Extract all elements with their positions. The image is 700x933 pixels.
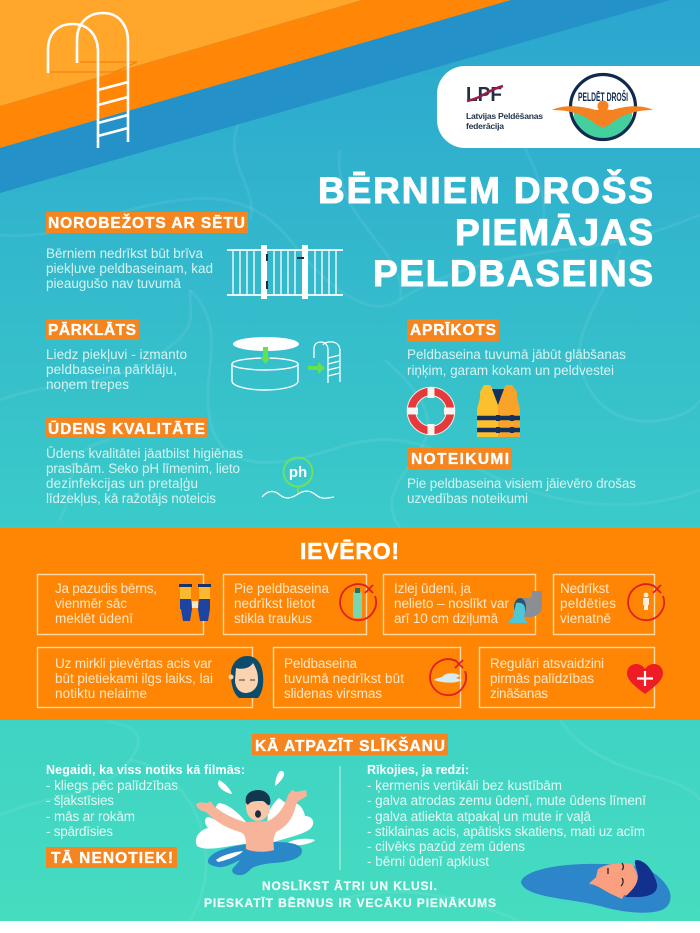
text block: Liedz piekļuvi - izmanto: [46, 347, 187, 362]
text block: [407, 476, 636, 506]
text block: [46, 446, 243, 506]
title: BĒRNIEM DROŠS: [318, 169, 653, 211]
card: glass: Pie peldbaseina: [234, 581, 329, 596]
text block: Bērniem nedrīkst būt brīva: [46, 246, 203, 261]
card: first aid: [480, 648, 663, 708]
panel: water quality section: [46, 418, 334, 506]
text block: act if you see: - stiklainas acis, apātisks skatiens, mati uz acīm: [367, 824, 645, 839]
icon: pool ladder: [48, 13, 137, 148]
icon: splashing child: [196, 771, 315, 875]
heading: ŪDENS KVALITĀTE: [48, 421, 205, 438]
text block: do not expect: - kliegs pēc palīdzības: [46, 778, 178, 793]
icon: heart with plus: [627, 664, 663, 694]
panel: light orange deck: [0, 0, 362, 106]
text block: prasībām. Seko pH līmenim, lieto: [46, 461, 240, 476]
logo caption: [466, 111, 543, 131]
title: [318, 169, 653, 294]
card: eyes closed: [38, 648, 263, 708]
text block: pieaugušo nav tuvumā: [46, 276, 181, 291]
text block: act if you see: - cilvēks pazūd zem ūdens: [367, 839, 525, 854]
card: glass: [224, 574, 376, 634]
card: pour water: nelieto – noslīkt var: [394, 596, 510, 611]
text block: uzvedības noteikumi: [407, 491, 528, 506]
panel: covered section: [46, 319, 340, 392]
heading: PĀRKLĀTS: [48, 322, 136, 339]
icon: pH meter: ph: [289, 464, 307, 481]
heading: IEVĒRO!: [300, 538, 399, 564]
text block: act if you see: - galva atrodas zemu ūdenī, mute ūdens līmenī: [367, 793, 646, 808]
text block: riņķim, garam kokam un peldvestei: [407, 363, 614, 378]
title: PIEMĀJAS: [455, 212, 653, 253]
logo: Peldēt droši: [552, 74, 653, 140]
panel: rules section: [407, 448, 636, 506]
text block: do not expect: Negaidi, ka viss notiks kā filmās:: [46, 763, 245, 777]
panel: equipped section: [407, 319, 626, 437]
text block: act if you see: - bērni ūdenī apklust: [367, 854, 489, 869]
card: glass: stikla traukus: [234, 611, 312, 626]
text block: act if you see: Rīkojies, ja redzi:: [367, 763, 469, 777]
card: slippery: slidenas virsmas: [284, 686, 382, 701]
text block: peldbaseina pārklāju,: [46, 362, 177, 377]
title: PELDBASEINS: [373, 253, 653, 294]
panel: pool water background: [0, 0, 700, 530]
card: not alone: vienatnē: [560, 611, 611, 626]
icon: fence: [227, 245, 343, 299]
text block: [46, 246, 213, 291]
text block: do not expect: - mās ar rokām: [46, 809, 135, 824]
text block: Peldbaseina tuvumā jābūt glābšanas: [407, 347, 626, 362]
icon: drowning person: [521, 860, 671, 913]
card: slippery: Peldbaseina: [284, 656, 357, 671]
icon: woman face: [228, 656, 263, 698]
card: first aid: Regulāri atsvaidzini: [490, 656, 604, 671]
card: lost child: Ja pazudis bērns,: [55, 581, 157, 596]
text block: do not expect: [46, 763, 245, 839]
panel: IEVĒRO section: [0, 528, 700, 720]
callout: TĀ NENOTIEK!: [51, 850, 173, 867]
closing message: NOSLĪKST ĀTRI UN KLUSI.: [262, 879, 437, 893]
logo caption: federācija: [466, 121, 504, 131]
text block: noņem trepes: [46, 377, 129, 392]
card: pour water: arī 10 cm dziļumā: [394, 611, 498, 626]
icon: covered pool: [232, 337, 299, 390]
card: first aid: pirmās palīdzības: [490, 671, 594, 686]
icon: lifebuoy: [407, 387, 455, 435]
card: slippery: tuvumā nedrīkst būt: [284, 671, 404, 686]
logo: LPF: LPF: [466, 84, 502, 106]
card: lost child: meklēt ūdenī: [55, 611, 133, 626]
logo caption: Latvijas Peldēšanas: [466, 111, 543, 121]
text block: Pie peldbaseina visiem jāievēro drošas: [407, 476, 636, 491]
icon: no glass bottle: [340, 584, 376, 620]
card: slippery: [274, 648, 466, 708]
panel: orange band: [0, 0, 511, 148]
text block: [46, 347, 187, 392]
heading: APRĪKOTS: [410, 322, 496, 339]
text block: act if you see: - ķermenis vertikāli bez kustībām: [367, 778, 562, 793]
icon: no wet floor: [430, 659, 466, 695]
icon: binoculars: [179, 584, 211, 621]
icon: removed ladder: [308, 342, 340, 383]
text block: act if you see: [367, 763, 646, 869]
logo: Peldēt droši: PELDĒT DROŠI: [578, 91, 628, 104]
card: eyes closed: notiktu nelaime: [55, 686, 147, 701]
card: pour water: Izlej ūdeni, ja: [394, 581, 471, 596]
card: eyes closed: būt pietiekami ilgs laiks, lai: [55, 671, 213, 686]
card: first aid: zināšanas: [490, 686, 548, 701]
icon: life vest: [477, 385, 520, 437]
closing message: [204, 879, 496, 910]
text block: piekļuve peldbaseinam, kad: [46, 261, 213, 276]
text block: Ūdens kvalitātei jāatbilst higiēnas: [46, 446, 243, 461]
card: eyes closed: Uz mirkli pievērtas acis var: [55, 656, 212, 671]
card: not alone: peldēties: [560, 596, 616, 611]
text block: do not expect: - šļakstīsies: [46, 793, 114, 808]
closing message: PIESKATĪT BĒRNUS IR VECĀKU PIENĀKUMS: [204, 896, 496, 910]
card: glass: nedrīkst lietot: [234, 596, 315, 611]
panel: fence section: [46, 212, 343, 299]
text block: dezinfekcijas un pretaļģu: [46, 476, 198, 491]
text block: act if you see: - galva atliekta atpakaļ un mute ir vaļā: [367, 809, 591, 824]
card: pour water: [384, 574, 542, 634]
card: lost child: vienmēr sāc: [55, 596, 127, 611]
panel: logos: [437, 66, 700, 148]
icon: pH meter: [262, 458, 334, 498]
card: lost child: [38, 574, 211, 634]
card: not alone: Nedrīkst: [560, 581, 609, 596]
card: not alone: [554, 574, 664, 634]
panel: recognising drowning section: [0, 720, 700, 921]
icon: pipe: [508, 591, 542, 623]
panel: blue band: [0, 0, 670, 193]
icon: no lone swimmer: [628, 584, 664, 620]
heading: KĀ ATPAZĪT SLĪKŠANU: [255, 737, 445, 755]
text block: [407, 347, 626, 378]
text block: līdzekļus, kā ražotājs noteicis: [46, 491, 216, 506]
text block: do not expect: - spārdīsies: [46, 824, 113, 839]
heading: NOTEIKUMI: [411, 451, 509, 468]
heading: NOROBEŽOTS AR SĒTU: [48, 214, 245, 232]
